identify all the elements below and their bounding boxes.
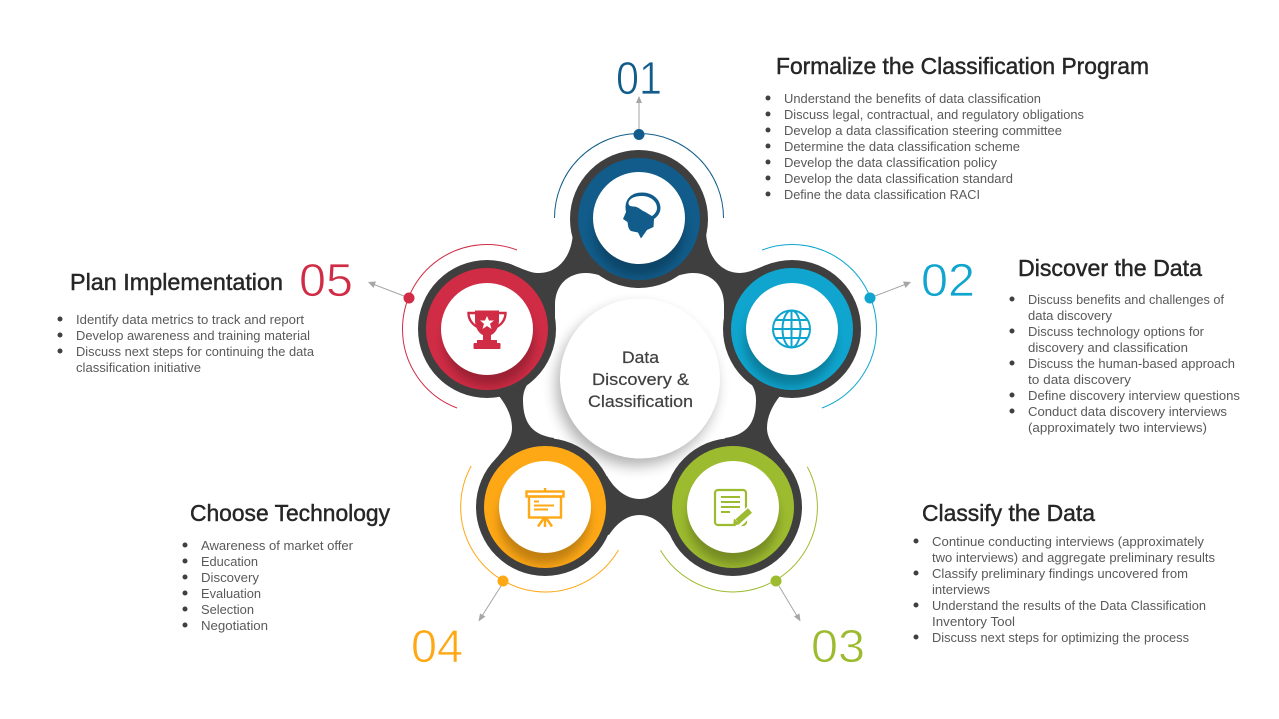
bullet list: Identify data metrics to track and report — [76, 312, 304, 327]
heading: Formalize the Classification Program — [776, 53, 1149, 79]
icon: trophy — [468, 310, 506, 349]
bullet list: Continue conducting interviews (approximately — [932, 534, 1204, 549]
center title: Classification — [588, 393, 693, 411]
center circle — [560, 298, 720, 458]
icon: globe — [773, 310, 810, 348]
bullet list: Discuss next steps for optimizing the process — [932, 630, 1189, 645]
central dark connector diagram — [487, 230, 792, 535]
node 01 blue — [570, 150, 708, 288]
bullet list: Discuss next steps for continuing the data — [76, 344, 315, 359]
bullet list: Develop awareness and training material — [76, 328, 310, 343]
bullet list: discovery and classification — [1028, 340, 1188, 355]
bullet list: Conduct data discovery interviews — [1028, 404, 1227, 419]
icon: presentation board — [526, 488, 564, 527]
bullet list: Evaluation — [201, 586, 261, 601]
bullet list: Education — [201, 554, 258, 569]
bullet list: Selection — [201, 602, 254, 617]
node 02 cyan — [723, 260, 861, 398]
arc and pointer 03 — [660, 467, 817, 622]
arc and pointer 05 — [368, 244, 517, 408]
center title — [588, 349, 693, 411]
bullet list: Understand the results of the Data Classification — [932, 598, 1206, 613]
heading: Discover the Data — [1018, 255, 1202, 281]
arc and pointer 02 — [762, 244, 911, 408]
text block: Choose Technology — [182, 500, 390, 633]
heading: Plan Implementation — [70, 269, 283, 295]
bullet list — [182, 538, 354, 633]
heading: Classify the Data — [922, 500, 1095, 526]
arc and pointer 04 — [461, 466, 618, 622]
bullet list: Develop the data classification policy — [784, 155, 997, 170]
bullet list: Classify preliminary findings uncovered from — [932, 566, 1188, 581]
bullet list: Discovery — [201, 570, 259, 585]
bullet list: data discovery — [1028, 308, 1112, 323]
bullet list: (approximately two interviews) — [1028, 420, 1207, 435]
bullet list: Inventory Tool — [932, 614, 1015, 629]
bullet list: Define discovery interview questions — [1028, 388, 1240, 403]
bullet list — [766, 91, 1084, 202]
arc and pointer 01 — [554, 96, 724, 218]
heading: Choose Technology — [190, 500, 390, 526]
bullet list: two interviews) and aggregate preliminary results — [932, 550, 1216, 565]
node 05 red — [418, 260, 556, 398]
bullet list: Develop the data classification standard — [784, 171, 1013, 186]
icon: document and pencil — [715, 490, 751, 526]
text block: Plan Implementation — [58, 269, 315, 375]
node 03 green — [664, 438, 802, 576]
center title: Discovery & — [592, 371, 689, 389]
bullet list: Discuss benefits and challenges of — [1028, 292, 1224, 307]
center circle shadow — [556, 306, 716, 466]
text block: Classify the Data — [914, 500, 1216, 645]
text block: Discover the Data — [1010, 255, 1240, 435]
number 03: 03 — [811, 620, 865, 672]
bullet list: Develop a data classification steering committee — [784, 123, 1062, 138]
bullet list: Discuss legal, contractual, and regulatory obligations — [784, 107, 1084, 122]
number 05: 05 — [299, 254, 353, 306]
bullet list: Determine the data classification scheme — [784, 139, 1020, 154]
bullet list: Define the data classification RACI — [784, 187, 980, 202]
white inner blob — [519, 270, 760, 500]
number 04: 04 — [411, 620, 463, 672]
bullet list: Understand the benefits of data classification — [784, 91, 1041, 106]
number 01: 01 — [616, 52, 662, 104]
center title: Data — [622, 349, 660, 367]
node 04 orange — [476, 438, 614, 576]
number 02: 02 — [921, 254, 975, 306]
bullet list: to data discovery — [1028, 372, 1132, 387]
bullet list — [914, 534, 1216, 645]
bullet list: Discuss technology options for — [1028, 324, 1205, 339]
dark web connecting the five nodes — [487, 230, 792, 535]
bullet list — [1010, 292, 1240, 435]
bullet list: Discuss the human-based approach — [1028, 356, 1235, 371]
text block: Formalize the Classification Program — [766, 53, 1149, 202]
icon: head with brain — [623, 192, 660, 238]
bullet list: classification initiative — [76, 360, 201, 375]
bullet list: Negotiation — [201, 618, 268, 633]
bullet list: Awareness of market offer — [201, 538, 354, 553]
bullet list: interviews — [932, 582, 991, 597]
bullet list — [58, 312, 315, 375]
